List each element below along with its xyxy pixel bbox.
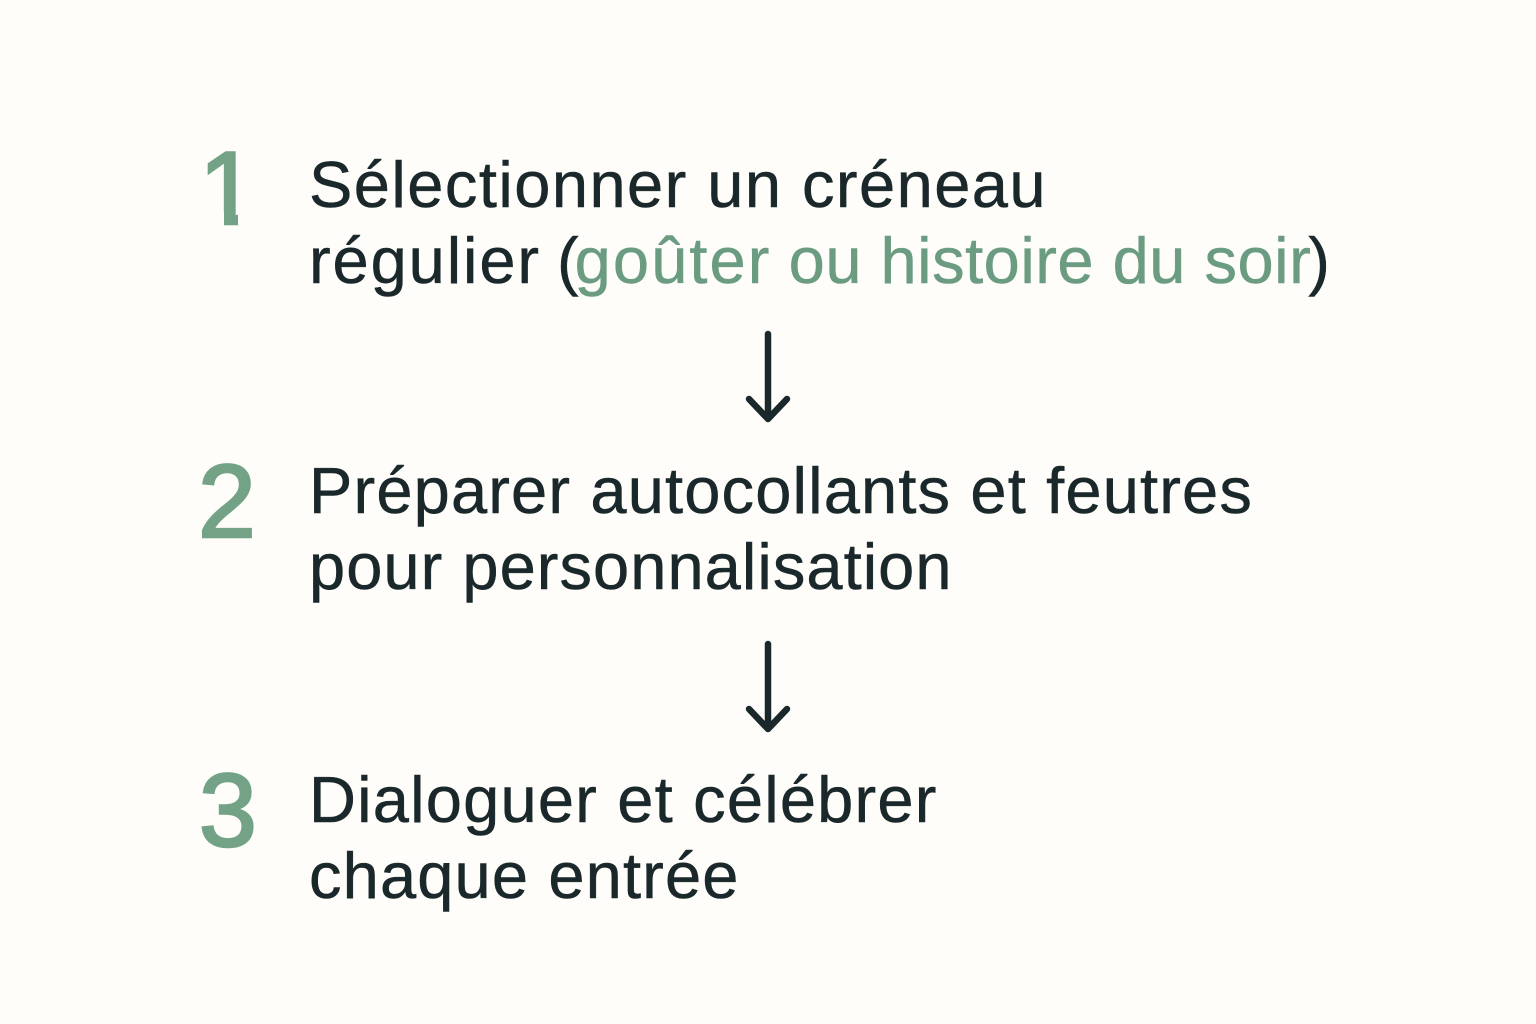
step 2 text: pour personnalisation bbox=[309, 530, 953, 603]
step 2 text: Préparer autocollants et feutres bbox=[309, 454, 1253, 527]
arrow: step 1 to step 2 bbox=[746, 330, 790, 422]
step 3 text: Dialoguer et célébrer bbox=[309, 763, 938, 836]
step 1 text: Sélectionner un créneau bbox=[309, 148, 1047, 221]
step 2 number: 2 bbox=[198, 444, 256, 560]
step 3 text: chaque entrée bbox=[309, 839, 740, 912]
step 3 text bbox=[309, 763, 938, 912]
arrow: step 2 to step 3 bbox=[746, 640, 790, 732]
step 1 text: régulier (goûter ou histoire du soir) bbox=[309, 224, 1330, 297]
step 1 number: 1 bbox=[199, 131, 257, 247]
step 1 text bbox=[309, 148, 1330, 297]
step 3 number: 3 bbox=[199, 753, 257, 869]
step 2 text bbox=[309, 454, 1253, 603]
